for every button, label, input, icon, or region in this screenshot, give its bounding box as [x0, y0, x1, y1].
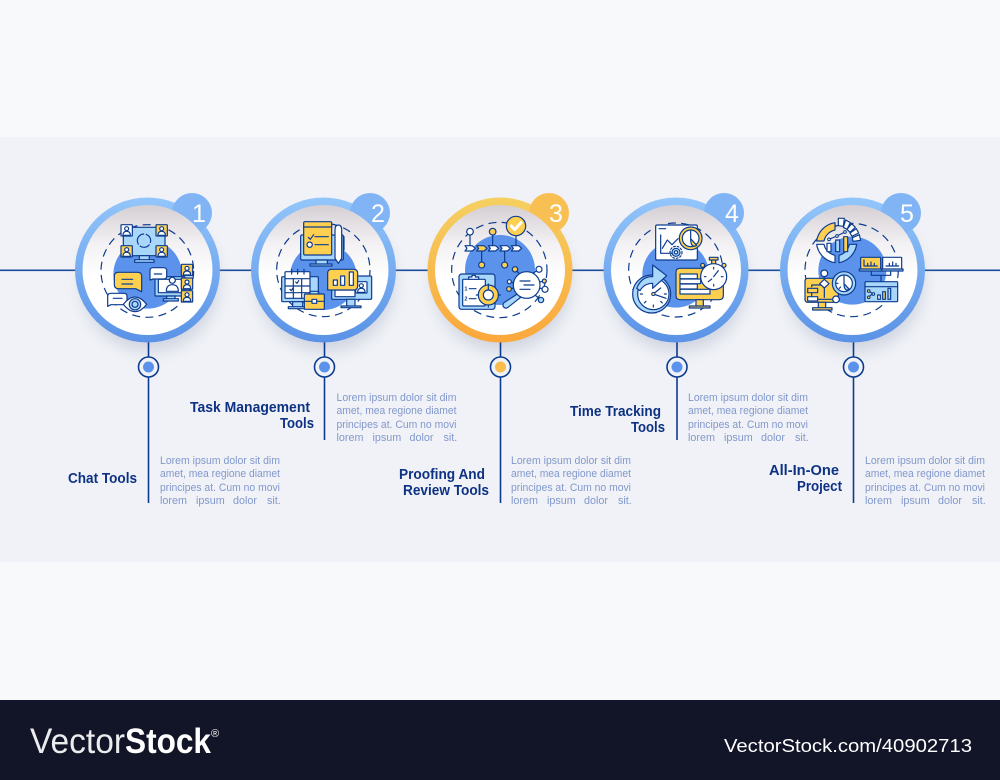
ring and badge 1 [75, 193, 220, 342]
text block 2: amet, mea regione diamet [336, 405, 456, 417]
text block 2: principes at. Cum no movi [336, 419, 456, 431]
background panel [0, 137, 1000, 562]
circle shadow 2 [258, 215, 394, 351]
text block 1: Lorem ipsum dolor sit dim [160, 455, 280, 467]
text block 2: sit. [444, 432, 457, 444]
step 5: all-in-one project [769, 193, 986, 507]
ring and badge 4 [604, 193, 748, 342]
circle shadow 5 [787, 215, 923, 351]
icon: proofing and review [452, 216, 548, 318]
step 5 numeral: 5 [900, 200, 914, 228]
connector 4 [667, 340, 687, 440]
step 4 numeral: 4 [725, 200, 739, 228]
heading 2: Task Management [190, 400, 310, 416]
heading 5: Project [797, 479, 842, 495]
text block 5: principes at. Cum no movi [865, 482, 985, 494]
icon: proofing and review: 2 [464, 297, 467, 303]
icon: proofing and review: 1 [464, 287, 467, 293]
text block 4: amet, mea regione diamet [688, 405, 808, 417]
circle shadow 4 [610, 215, 746, 351]
text block 3: principes at. Cum no movi [511, 482, 631, 494]
text block 1: lorem [160, 495, 187, 507]
text block 5: ipsum [901, 495, 930, 507]
text block 2: dolor [410, 432, 434, 444]
step 2 numeral: 2 [371, 200, 385, 228]
heading 3: Proofing And [399, 467, 485, 483]
text block 1: amet, mea regione diamet [160, 468, 280, 480]
horizontal timeline line [0, 270, 1000, 271]
ring and badge 5 [780, 193, 925, 342]
text block 4: ipsum [724, 432, 753, 444]
text block 5: sit. [972, 495, 986, 507]
connector 1 [138, 340, 158, 503]
step 2: task management tools [190, 193, 457, 444]
icon: time tracking [629, 223, 727, 317]
text block 1: sit. [267, 495, 281, 507]
text block 5: Lorem ipsum dolor sit dim [865, 455, 985, 467]
heading 2: Tools [280, 416, 314, 432]
text block 3: sit. [618, 495, 632, 507]
connector 2 [314, 340, 334, 440]
text block 3: Lorem ipsum dolor sit dim [511, 455, 631, 467]
heading 4: Tools [631, 420, 665, 436]
circle shadow 3 [434, 215, 570, 351]
footer logo: Stock [125, 722, 211, 761]
text block 1: principes at. Cum no movi [160, 482, 280, 494]
text block 3: ipsum [547, 495, 576, 507]
icon: all-in-one project [805, 218, 903, 317]
icon: chat tools [101, 225, 194, 317]
footer image id: VectorStock.com/40902713 [724, 736, 972, 756]
step 4: time tracking tools [570, 193, 809, 444]
text block 1: ipsum [196, 495, 225, 507]
connector 5 [844, 340, 864, 503]
heading 1: Chat Tools [68, 471, 137, 487]
ring and badge 3 [428, 193, 572, 342]
circle shadow 1 [82, 215, 218, 351]
text block 4: lorem [688, 432, 715, 444]
step 3 numeral: 3 [549, 200, 563, 228]
text block 1: dolor [233, 495, 257, 507]
connector 3 [490, 340, 510, 503]
text block 4: Lorem ipsum dolor sit dim [688, 392, 808, 404]
step 3: proofing and review tools [399, 193, 632, 507]
text block 2: Lorem ipsum dolor sit dim [336, 392, 457, 404]
footer logo: Vector [30, 722, 125, 761]
heading 3: Review Tools [403, 483, 489, 499]
text block 4: dolor [761, 432, 785, 444]
ring and badge 2 [251, 193, 396, 342]
text block 3: amet, mea regione diamet [511, 468, 631, 480]
text block 3: lorem [511, 495, 538, 507]
text block 4: principes at. Cum no movi [688, 419, 808, 431]
registered mark: ® [211, 728, 219, 740]
text block 2: ipsum [372, 432, 401, 444]
heading 5: All-In-One [769, 463, 839, 479]
text block 4: sit. [795, 432, 809, 444]
footer bar [0, 700, 1000, 780]
icon: task management [277, 222, 372, 317]
text block 5: lorem [865, 495, 892, 507]
step 1 numeral: 1 [192, 200, 206, 228]
text block 5: dolor [938, 495, 962, 507]
text block 3: dolor [584, 495, 608, 507]
step 1: chat tools [68, 193, 281, 507]
text block 5: amet, mea regione diamet [865, 468, 985, 480]
text block 2: lorem [336, 432, 364, 444]
heading 4: Time Tracking [570, 404, 661, 420]
